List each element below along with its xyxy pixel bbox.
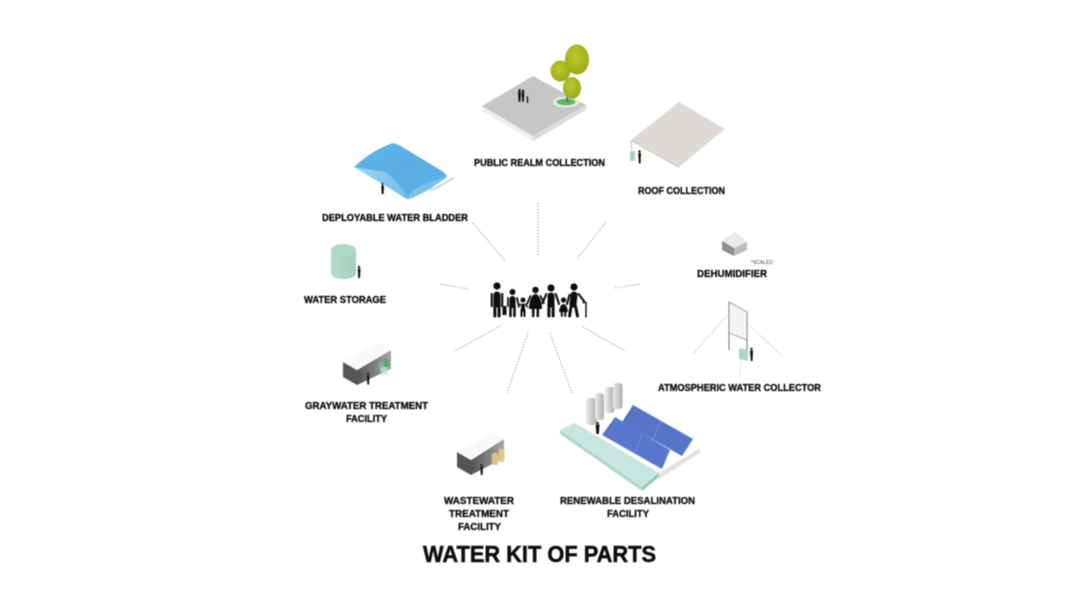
dotted connector lines radiating from the family (440, 203, 640, 393)
icon: family group (492, 282, 586, 317)
label: graywater treatment facility: GRAYWATER TREATMENT (305, 400, 429, 412)
label: wastewater treatment facility: FACILITY (458, 521, 501, 533)
label: renewable desalination facility: FACILITY (607, 508, 649, 520)
label: graywater treatment facility: FACILITY (346, 413, 387, 425)
icon: wastewater treatment facility (457, 432, 504, 475)
label: scaled note: *SCALED (751, 260, 773, 266)
label: renewable desalination facility (560, 495, 695, 520)
icon: public realm collection plaza with tree (482, 44, 589, 141)
label: roof collection: ROOF COLLECTION (638, 185, 725, 197)
label: wastewater treatment facility: TREATMENT (449, 508, 510, 520)
icon: roof collection (630, 102, 725, 168)
label: water storage: WATER STORAGE (304, 294, 386, 306)
icon: water storage tank (331, 244, 360, 279)
label: renewable desalination facility: RENEWABLE DESALINATION (560, 495, 695, 507)
icon: atmospheric water collector (693, 302, 782, 378)
label: public realm collection: PUBLIC REALM COLLECTION (474, 157, 605, 169)
icon: deployable water bladder (354, 143, 454, 199)
icon: graywater treatment facility (343, 342, 391, 385)
title: WATER KIT OF PARTS (423, 541, 656, 567)
label: graywater treatment facility (305, 400, 429, 425)
label: wastewater treatment facility: WASTEWATER (444, 495, 514, 507)
label: deployable water bladder: DEPLOYABLE WATER BLADDER (322, 212, 468, 224)
label: dehumidifier: DEHUMIDIFIER (697, 268, 767, 280)
label: atmospheric water collector: ATMOSPHERIC WATER COLLECTOR (658, 382, 821, 394)
label: wastewater treatment facility (444, 495, 514, 533)
icon: renewable desalination facility (560, 383, 700, 491)
icon: dehumidifier (722, 232, 747, 256)
